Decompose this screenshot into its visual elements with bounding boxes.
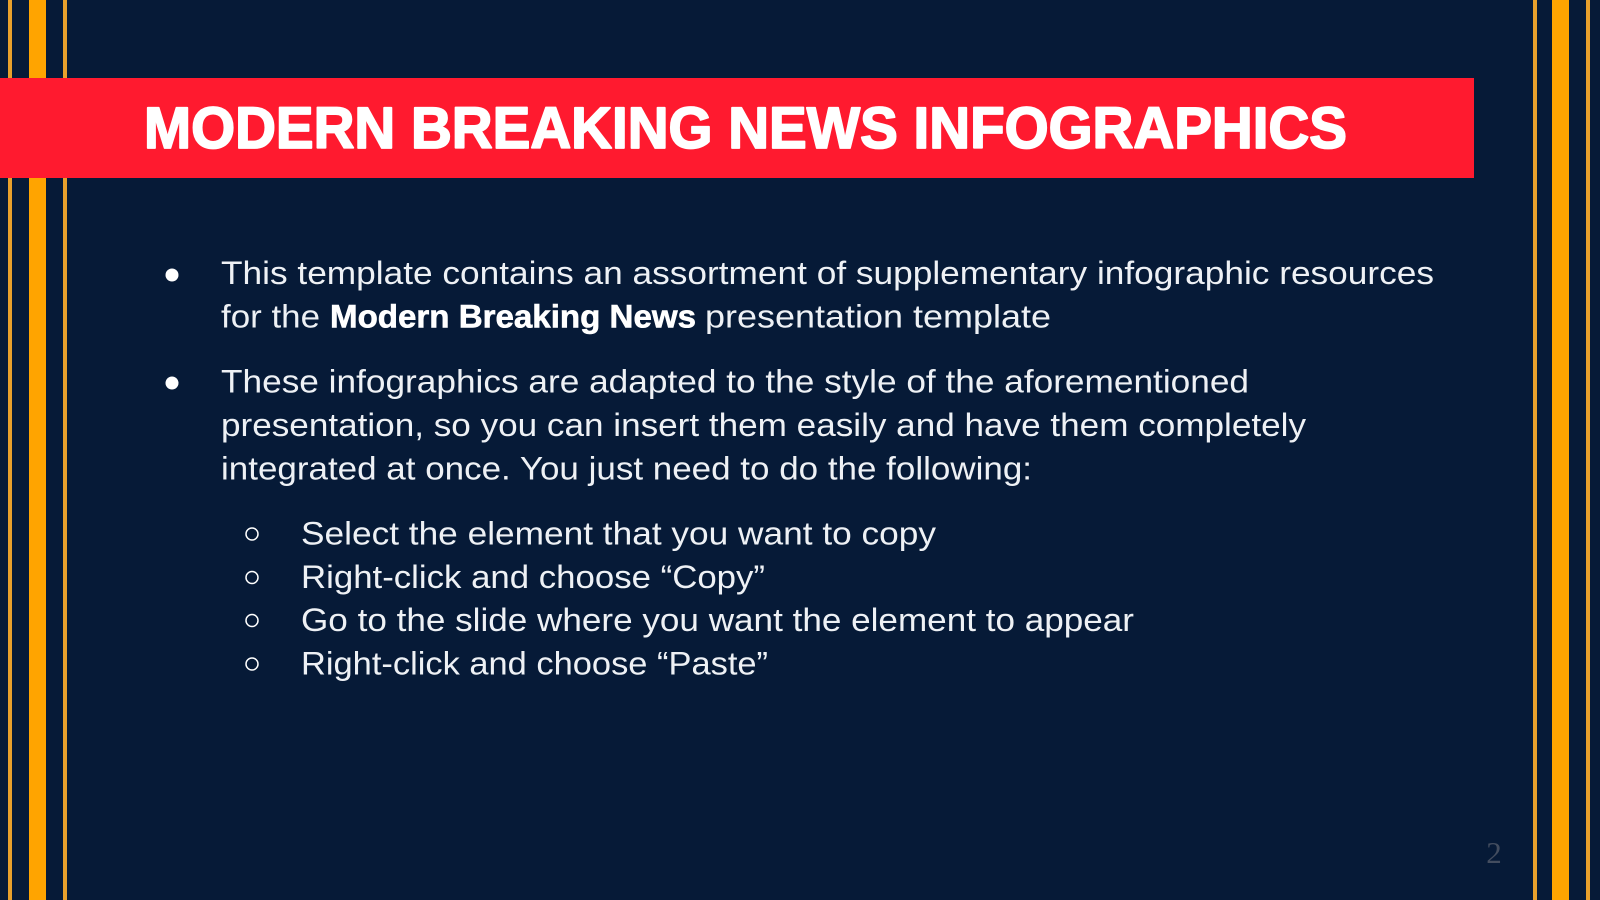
sub-list: copy and paste steps: [246, 516, 1134, 682]
bullet 1: template description: presentation template: [705, 298, 1051, 334]
title: MODERN BREAKING NEWS INFOGRAPHICS: [144, 96, 1347, 161]
title banner: [0, 78, 1474, 178]
bullet 2: adaptation note: [166, 364, 1307, 486]
sub-list: copy and paste steps: Right-click and choose “Paste”: [301, 646, 768, 682]
bullet 1: template description: for the: [221, 298, 320, 334]
sub-list: copy and paste steps: Select the element that you want to copy: [301, 516, 937, 552]
sub-list: copy and paste steps: Right-click and choose “Copy”: [301, 559, 765, 595]
bullet 1: template description: Modern Breaking News: [330, 298, 696, 334]
page number: 2: [1486, 835, 1502, 870]
sub-list: copy and paste steps: Go to the slide where you want the element to appear: [301, 602, 1134, 638]
bullet 2: adaptation note: presentation, so you can insert them easily and have them completely: [221, 407, 1307, 443]
bullet 1: template description: This template contains an assortment of supplementary infographic resources: [221, 255, 1434, 291]
bullet 2: adaptation note: integrated at once. You just need to do the following:: [221, 450, 1032, 486]
bullet 1: template description: [166, 255, 1434, 334]
left decorative stripes: [8, 0, 67, 900]
right decorative stripes: [1533, 0, 1590, 900]
bullet 2: adaptation note: These infographics are adapted to the style of the aforementioned: [221, 364, 1249, 400]
